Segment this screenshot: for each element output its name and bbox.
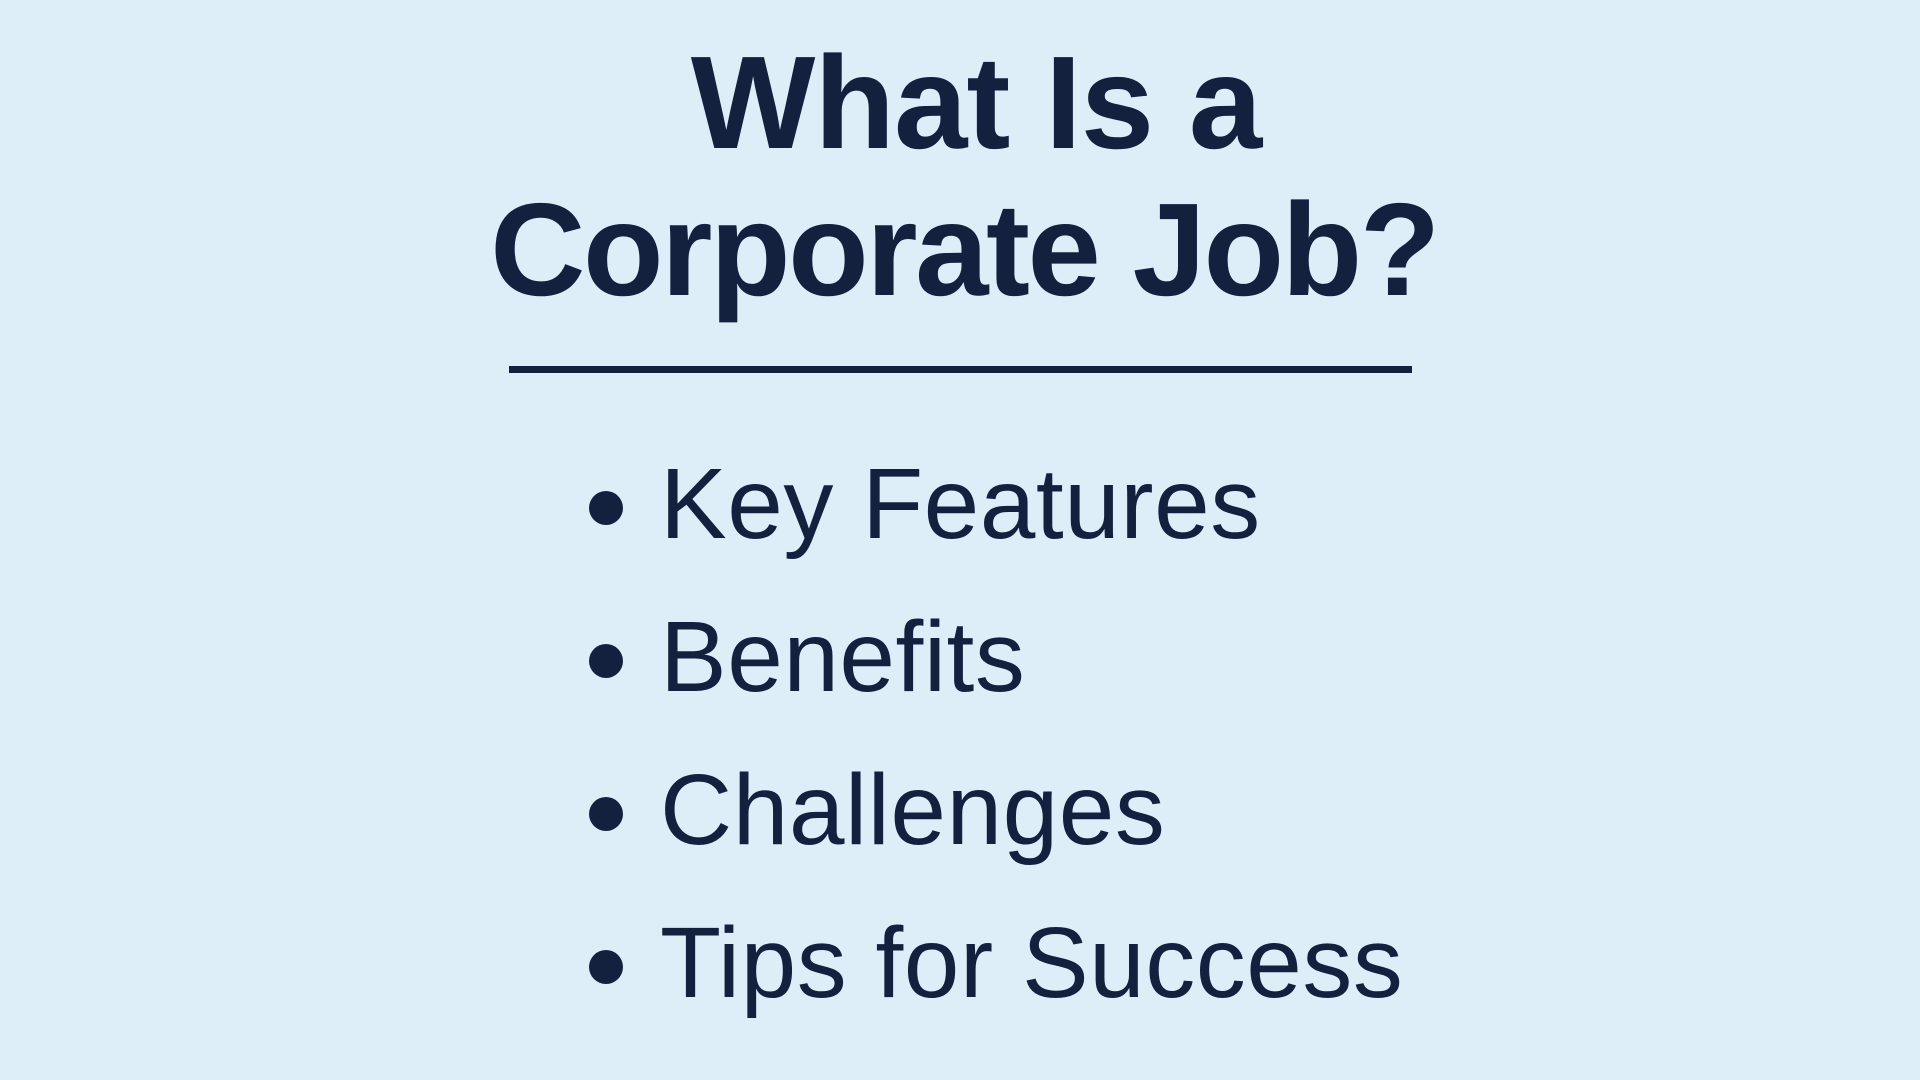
item: Benefits: Benefits [660,601,1025,713]
title [490,29,1438,323]
divider rule under title [509,366,1412,373]
title line 1: What Is a [691,29,1261,176]
item: Key Features: Key Features [660,448,1261,560]
list: topics [589,448,1403,1019]
title line 2: Corporate Job? [490,176,1438,323]
item: Tips for Success: Tips for Success [660,907,1403,1019]
item: Challenges: Challenges [660,754,1165,866]
